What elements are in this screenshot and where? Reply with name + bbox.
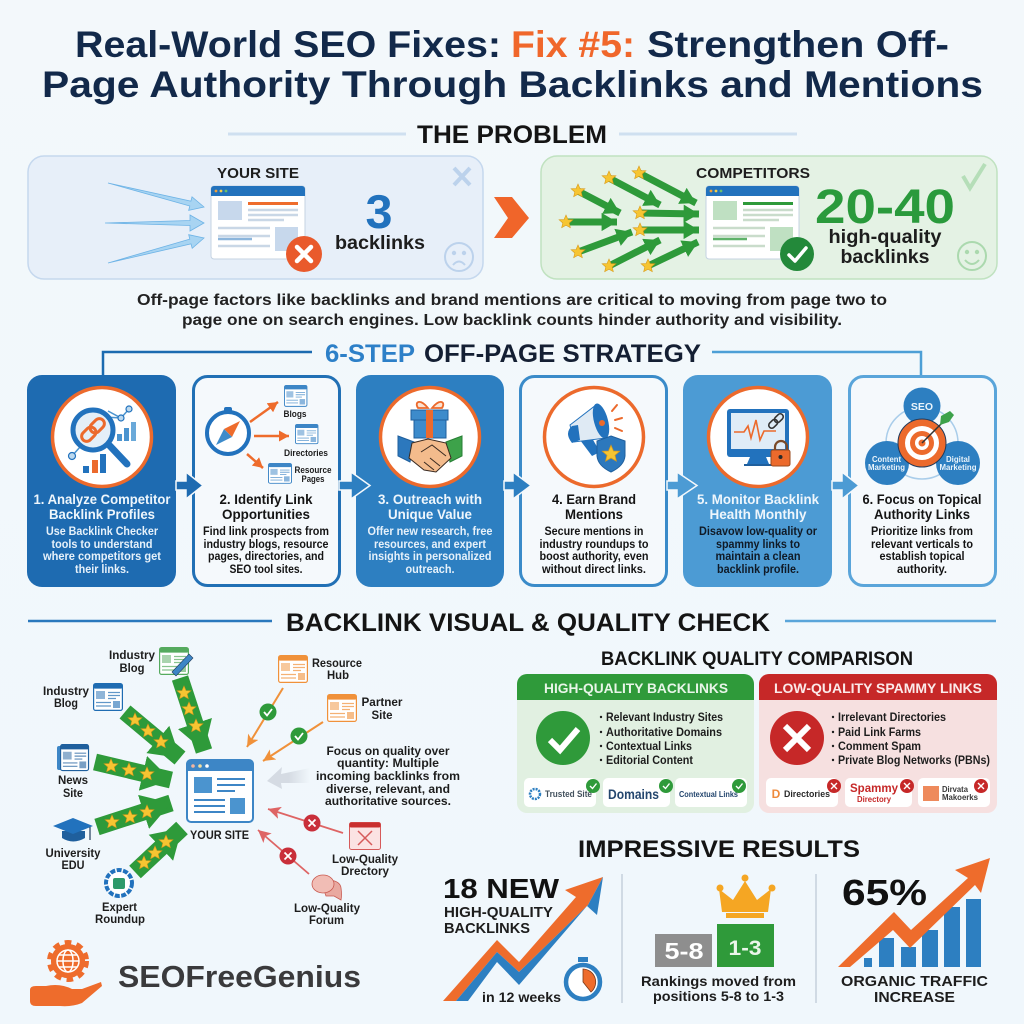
list: low-quality traits: Irrelevant Directories bbox=[838, 712, 946, 724]
text: step 5 body: maintain a clean bbox=[716, 551, 800, 563]
icon: compass bbox=[207, 407, 249, 454]
metric: 20-40 high-quality backlinks: backlinks bbox=[840, 247, 930, 268]
icon: sad face bbox=[445, 243, 473, 271]
heading: impressive results: IMPRESSIVE RESULTS bbox=[578, 836, 860, 863]
icon: resource pages bbox=[268, 463, 332, 485]
node: low-quality forum: Forum bbox=[309, 915, 344, 927]
metric: 65% organic traffic: 65% bbox=[842, 872, 927, 913]
text: step 2 body: Find link prospects from bbox=[203, 526, 329, 538]
icon: directories page: Directories bbox=[284, 448, 328, 459]
chip: contextual links bbox=[675, 778, 747, 807]
node: industry blog pencil: Blog bbox=[120, 663, 144, 675]
arrow: your site to competitors bbox=[494, 197, 529, 238]
title: Strengthen Off- bbox=[647, 24, 949, 65]
text: step 3 body bbox=[368, 526, 492, 576]
node: industry blog bbox=[43, 684, 122, 710]
node: news site: News bbox=[58, 775, 88, 787]
icon: ghost x bbox=[454, 168, 470, 185]
panel: step 2 bbox=[194, 376, 340, 586]
text: quality over quantity: quantity: Multiple bbox=[337, 756, 439, 770]
chart: growth arrow bbox=[443, 877, 603, 1001]
chip: dirvata makoerks: Dirvata bbox=[942, 785, 969, 794]
list: high-quality traits bbox=[600, 712, 723, 767]
panel: step 3 bbox=[356, 375, 504, 587]
chip: directories bbox=[766, 778, 841, 807]
text: step 5 title: 5. Monitor Backlink bbox=[697, 491, 819, 507]
text: step 3 title bbox=[378, 491, 482, 522]
metric: 20-40 high-quality backlinks: 20-40 bbox=[815, 181, 955, 234]
text: step 1 title: Backlink Profiles bbox=[49, 506, 155, 522]
icon: blogs page bbox=[284, 385, 307, 420]
text: step 3 title: Unique Value bbox=[388, 506, 472, 522]
metric: 3 backlinks: backlinks bbox=[335, 233, 425, 254]
chip: spammy directory bbox=[845, 778, 914, 807]
logo: seofreegenius: SEOFreeGenius bbox=[118, 959, 361, 994]
node: university edu: University bbox=[46, 848, 101, 860]
arrow: step 1 to 2 bbox=[176, 472, 203, 499]
node: resource hub: Resource bbox=[312, 658, 362, 670]
text: step 3 body: insights in personalized bbox=[368, 551, 492, 563]
text: step 6 title: 6. Focus on Topical bbox=[862, 491, 982, 507]
text: step 2 title bbox=[220, 491, 313, 522]
chart: traffic bars bbox=[864, 899, 981, 967]
node: resource hub: Hub bbox=[327, 670, 349, 682]
metric: 3 backlinks: 3 bbox=[366, 185, 392, 238]
metric: 18 new backlinks: 18 NEW bbox=[443, 873, 560, 904]
metric: rankings moved: Rankings moved from bbox=[641, 973, 796, 989]
arrow: gray focus pointer bbox=[267, 767, 310, 789]
title: Fix #5: bbox=[511, 24, 635, 65]
node: low-quality directory: Drectory bbox=[341, 866, 390, 878]
text: step 4 body: industry roundups to bbox=[540, 539, 648, 551]
heading: 6-step off-page strategy: OFF-PAGE STRATEGY bbox=[424, 340, 701, 368]
node: news site: Site bbox=[63, 788, 83, 800]
heading: the problem: THE PROBLEM bbox=[417, 121, 607, 149]
node: low-quality directory: Low-Quality bbox=[332, 854, 399, 866]
text: step 1 body: Use Backlink Checker bbox=[46, 526, 158, 538]
text: step 5 body: spammy links to bbox=[716, 539, 800, 551]
metric: 65% organic traffic bbox=[838, 858, 990, 1006]
text: step 6 body: relevant verticals to bbox=[871, 539, 973, 551]
metric: rankings moved bbox=[641, 874, 796, 1004]
title bbox=[42, 24, 983, 105]
node: partner site bbox=[263, 695, 403, 761]
metric: 65% organic traffic: ORGANIC TRAFFIC bbox=[841, 973, 988, 990]
text: step 5 body bbox=[699, 526, 817, 576]
node: university edu bbox=[46, 818, 101, 872]
list: low-quality traits: Paid Link Farms bbox=[838, 727, 921, 739]
panel: step 6 bbox=[850, 376, 996, 586]
text: step 1 title: 1. Analyze Competitor bbox=[34, 491, 171, 507]
panel: high-quality backlinks bbox=[517, 674, 754, 813]
metric: 20-40 high-quality backlinks bbox=[815, 181, 955, 268]
box: 1-3 bbox=[717, 924, 774, 967]
text: step 6 title: Authority Links bbox=[874, 506, 970, 522]
text: problem description: page one on search engines. Low backlink counts hinder authority and visibility. bbox=[182, 312, 842, 329]
text: step 6 body: establish topical bbox=[880, 551, 964, 563]
text: step 4 title bbox=[552, 491, 636, 522]
panel: low-quality spammy links: LOW-QUALITY SPAMMY LINKS bbox=[774, 680, 982, 696]
panel: low-quality spammy links bbox=[759, 674, 997, 813]
text: step 2 body: industry blogs, resource bbox=[204, 539, 328, 551]
list: high-quality traits: Authoritative Domains bbox=[606, 727, 722, 739]
text: step 5 body: Disavow low-quality or bbox=[699, 526, 817, 538]
arrow: step 3 to 4 bbox=[504, 472, 531, 499]
arrow: step 2 to 3 bbox=[339, 472, 370, 499]
icon: resource pages: Resource bbox=[294, 465, 332, 476]
icon: resource pages: Pages bbox=[302, 474, 324, 485]
text: step 3 body: outreach. bbox=[406, 564, 454, 576]
panel: step 4 bbox=[520, 376, 666, 586]
metric: 18 new backlinks: HIGH-QUALITY bbox=[444, 904, 553, 921]
text: step 2 body bbox=[203, 526, 329, 576]
icon: blogs page: Blogs bbox=[284, 409, 306, 420]
icon: star arrows bbox=[559, 166, 699, 272]
text: step 3 body: Offer new research, free bbox=[368, 526, 492, 538]
list: low-quality traits: Private Blog Networks (PBNs) bbox=[838, 755, 990, 767]
node: expert roundup: Expert bbox=[102, 902, 137, 914]
icon: ghost check bbox=[963, 164, 985, 188]
text: step 2 body: SEO tool sites. bbox=[230, 564, 302, 576]
chip: domains bbox=[603, 778, 673, 807]
node: resource hub bbox=[247, 656, 362, 747]
icon: browser window bbox=[211, 186, 305, 259]
chip: contextual links: Contextual Links bbox=[679, 789, 738, 799]
icon: seo target venn: SEO bbox=[911, 401, 933, 413]
text: step 1 body: their links. bbox=[75, 564, 129, 576]
heading: backlink visual and quality check: BACKLINK VISUAL & QUALITY CHECK bbox=[286, 609, 770, 637]
panel: competitors: COMPETITORS bbox=[696, 165, 810, 182]
icon: your site window bbox=[187, 760, 253, 842]
panel: your site bbox=[28, 156, 483, 279]
title: Real-World SEO Fixes: bbox=[75, 24, 501, 65]
node: expert roundup: Roundup bbox=[95, 914, 145, 926]
heading: 6-step off-page strategy: 6-STEP bbox=[325, 340, 415, 368]
text: step 1 body bbox=[42, 526, 161, 576]
icon: quality arrows with stars bbox=[95, 678, 204, 872]
arrow: step 5 to 6 bbox=[832, 472, 859, 499]
icon: monitor with lock bbox=[727, 409, 790, 466]
text: quality over quantity: Focus on quality over bbox=[326, 744, 450, 758]
panel: step 5 bbox=[683, 375, 832, 587]
metric: 18 new backlinks bbox=[443, 873, 603, 1005]
text: step 4 body: boost authority, even bbox=[540, 551, 648, 563]
node: news site bbox=[57, 745, 89, 800]
node: industry blog: Industry bbox=[43, 686, 90, 698]
icon: gear globe over hand bbox=[30, 944, 102, 1006]
icon: megaphone and shield bbox=[568, 402, 625, 472]
text: problem description: Off-page factors like backlinks and brand mentions are critical to moving from page two to bbox=[137, 292, 887, 309]
icon: magnifier with chain bbox=[68, 406, 136, 473]
text: step 1 body: where competitors get bbox=[42, 551, 161, 563]
node: low-quality directory bbox=[268, 809, 399, 878]
icon: browser window bbox=[706, 186, 799, 259]
icon: seo target venn: Marketing bbox=[868, 463, 905, 472]
icon: seo target venn: Digital bbox=[946, 455, 970, 464]
metric: 18 new backlinks: BACKLINKS bbox=[444, 920, 530, 937]
text: step 2 title: 2. Identify Link bbox=[220, 491, 313, 507]
box: 5-8: 5-8 bbox=[664, 938, 704, 964]
icon: seo target venn bbox=[865, 388, 980, 485]
node: partner site: Partner bbox=[362, 697, 403, 709]
text: quality over quantity: incoming backlinks from bbox=[316, 769, 460, 783]
chip: directories: D bbox=[772, 787, 781, 801]
icon: incoming arrows bbox=[105, 183, 204, 263]
icon: x circle bbox=[770, 711, 824, 765]
box: 1-3: 1-3 bbox=[728, 937, 762, 960]
node: low-quality forum: Low-Quality bbox=[294, 903, 361, 915]
text: step 4 body: without direct links. bbox=[541, 564, 646, 576]
node: expert roundup bbox=[95, 870, 145, 926]
node: partner site: Site bbox=[372, 710, 392, 722]
box: 5-8 bbox=[655, 934, 712, 967]
text: step 2 title: Opportunities bbox=[222, 506, 310, 522]
chip: spammy directory: Spammy bbox=[850, 781, 898, 795]
text: step 5 body: backlink profile. bbox=[717, 564, 799, 576]
arrow: step 4 to 5 bbox=[667, 472, 697, 499]
heading: backlink quality comparison: BACKLINK QUALITY COMPARISON bbox=[601, 649, 913, 670]
list: high-quality traits: Contextual Links bbox=[606, 741, 692, 753]
metric: 20-40 high-quality backlinks: high-quality bbox=[828, 227, 942, 248]
list: high-quality traits: Editorial Content bbox=[606, 755, 693, 767]
list: high-quality traits: Relevant Industry Sites bbox=[606, 712, 723, 724]
chip: trusted site bbox=[524, 778, 600, 807]
icon: stopwatch bbox=[566, 957, 600, 999]
icon: seo target venn: Marketing bbox=[940, 463, 977, 472]
text: step 5 title: Health Monthly bbox=[710, 506, 807, 522]
text: step 6 body: Prioritize links from bbox=[871, 526, 973, 538]
text: step 4 body bbox=[540, 526, 648, 576]
chip: spammy directory: Directory bbox=[857, 795, 892, 804]
text: step 2 body: pages, directories, and bbox=[208, 551, 324, 563]
text: step 1 title bbox=[34, 491, 171, 522]
list: low-quality traits bbox=[832, 712, 990, 767]
title: Page Authority Through Backlinks and Mentions bbox=[42, 64, 983, 105]
text: problem description bbox=[137, 292, 887, 329]
list: low-quality traits: Comment Spam bbox=[838, 741, 921, 753]
icon: directories page bbox=[284, 424, 328, 459]
panel: competitors bbox=[541, 156, 997, 279]
node: industry blog pencil bbox=[109, 648, 193, 676]
panel: high-quality backlinks: HIGH-QUALITY BACKLINKS bbox=[544, 680, 728, 696]
text: step 6 title bbox=[862, 491, 982, 522]
text: step 4 title: Mentions bbox=[565, 506, 623, 522]
chip: dirvata makoerks: Makoerks bbox=[942, 793, 979, 802]
metric: 18 new backlinks: in 12 weeks bbox=[482, 989, 561, 1005]
text: step 5 title bbox=[697, 491, 819, 522]
node: industry blog pencil: Industry bbox=[109, 650, 156, 662]
node: university edu: EDU bbox=[62, 860, 84, 872]
text: step 6 body bbox=[871, 526, 973, 576]
icon: green check badge bbox=[780, 237, 814, 271]
metric: 3 backlinks bbox=[335, 185, 425, 254]
metric: 65% organic traffic: INCREASE bbox=[874, 989, 955, 1006]
icon: red x badge bbox=[286, 236, 322, 272]
text: quality over quantity bbox=[316, 744, 460, 808]
chip: trusted site: Trusted Site bbox=[545, 789, 592, 799]
node: low-quality forum bbox=[258, 830, 361, 927]
text: step 3 body: resources, and expert bbox=[374, 539, 486, 551]
text: step 3 title: 3. Outreach with bbox=[378, 491, 482, 507]
icon: gift and handshake bbox=[398, 402, 462, 472]
chart: backlink diagram bbox=[43, 648, 460, 927]
node: industry blog: Blog bbox=[54, 698, 78, 710]
arrow: traffic growth bbox=[838, 858, 990, 967]
text: quality over quantity: diverse, relevant, and bbox=[326, 782, 450, 796]
icon: check circle bbox=[536, 711, 590, 765]
logo: seofreegenius bbox=[30, 944, 361, 1006]
text: step 1 body: tools to understand bbox=[52, 539, 152, 551]
text: step 4 title: 4. Earn Brand bbox=[552, 491, 636, 507]
chip: dirvata makoerks bbox=[918, 778, 990, 807]
text: quality over quantity: authoritative sources. bbox=[325, 794, 451, 808]
icon: seo target venn: Content bbox=[872, 455, 901, 464]
panel: step 1 bbox=[27, 375, 176, 587]
icon: smile face bbox=[958, 242, 986, 270]
text: step 6 body: authority. bbox=[897, 564, 947, 576]
chip: directories: Directories bbox=[784, 789, 830, 800]
metric: rankings moved: positions 5-8 to 1-3 bbox=[653, 988, 784, 1004]
text: step 4 body: Secure mentions in bbox=[544, 526, 644, 538]
icon: your site window: YOUR SITE bbox=[190, 830, 249, 842]
chip: domains: Domains bbox=[608, 786, 659, 802]
panel: your site: YOUR SITE bbox=[217, 165, 299, 182]
icon: crown bbox=[716, 874, 776, 918]
icon: arrows to blogs directories resource pages bbox=[247, 402, 289, 468]
